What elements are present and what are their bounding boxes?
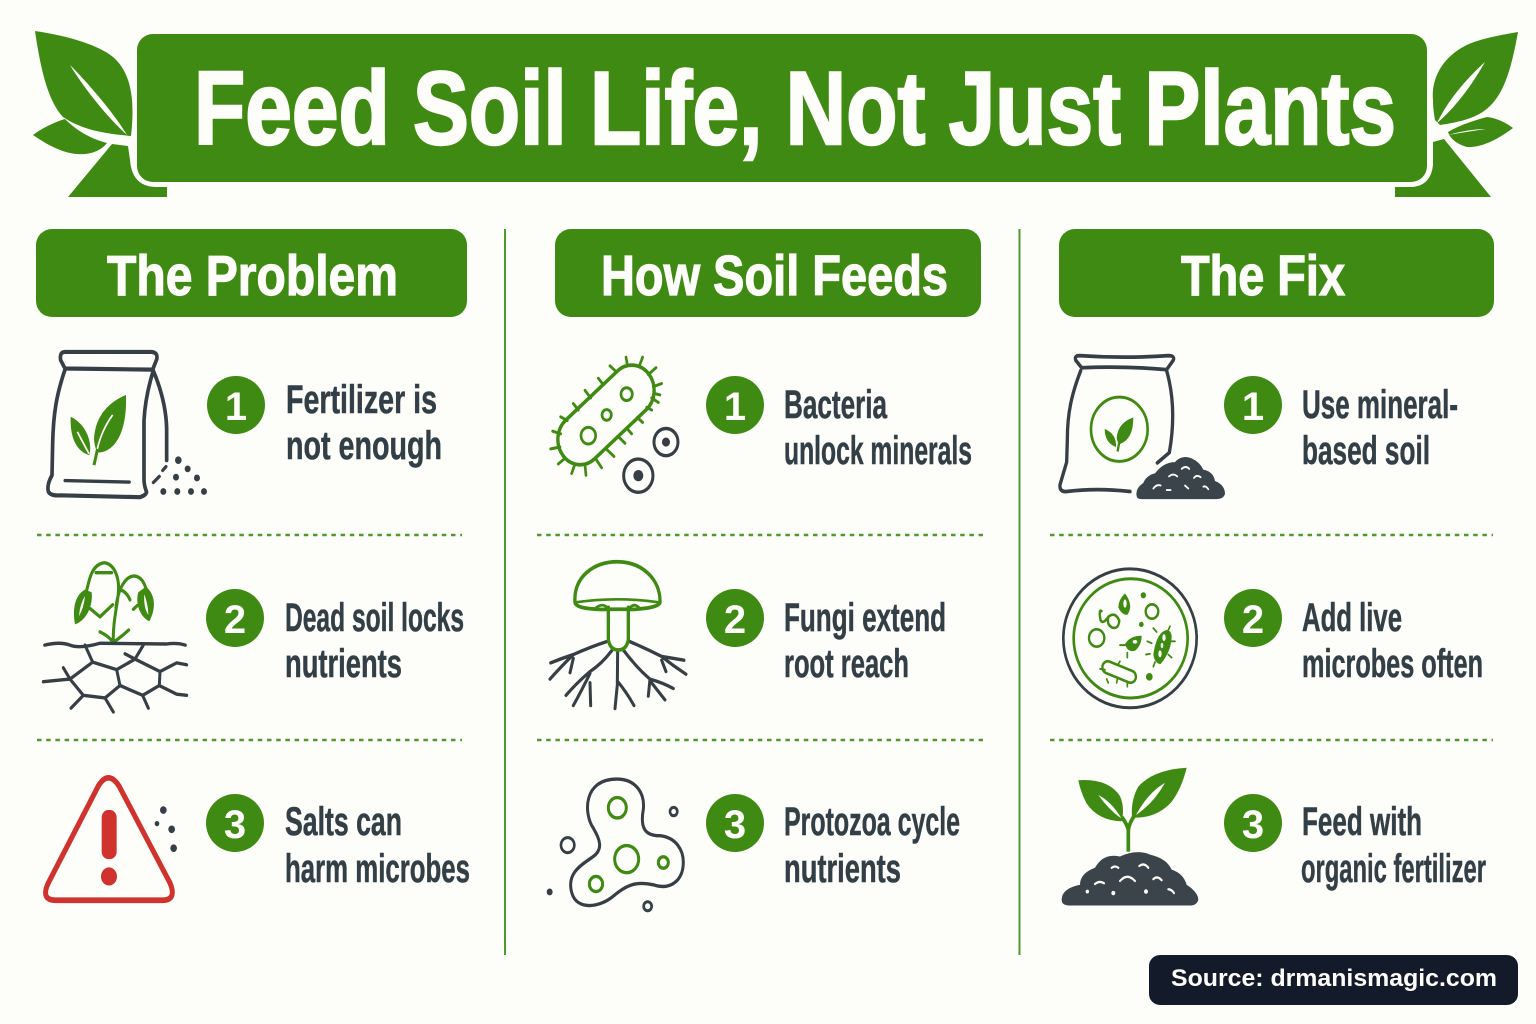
- text: fungi extend root reach: Fungi extend: [784, 596, 946, 640]
- right leaf decoration: [1395, 32, 1518, 197]
- number badge 2: [1224, 589, 1282, 647]
- number badge 3: [1224, 794, 1282, 852]
- icon: mineral soil sack with pile: [1060, 356, 1225, 499]
- text: feed with organic fertilizer: [1301, 800, 1486, 891]
- text: dead soil locks nutrients: nutrients: [285, 642, 402, 686]
- icon: bacteria: [549, 355, 678, 492]
- number badge 2: [206, 589, 264, 647]
- number badge 3: [706, 794, 764, 852]
- number badge 2: 2: [1242, 598, 1264, 642]
- text: dead soil locks nutrients: [285, 596, 464, 686]
- text: protozoa cycle nutrients: [784, 800, 960, 891]
- number badge 2: [706, 589, 764, 647]
- text: use mineral-based soil: based soil: [1302, 429, 1430, 473]
- number badge 1: [207, 376, 265, 434]
- banner bar: [137, 34, 1427, 182]
- text: bacteria unlock minerals: [784, 383, 972, 473]
- text: protozoa cycle nutrients: nutrients: [784, 847, 901, 891]
- icon: seedling in soil: [1062, 768, 1198, 906]
- icon: wilting plant on cracked soil: [43, 563, 187, 712]
- text: add live microbes often: [1302, 596, 1483, 686]
- heading: The Fix: The Fix: [1181, 244, 1345, 308]
- text: fertilizer is not enough: Fertilizer is: [286, 378, 437, 422]
- source badge: [1149, 955, 1518, 1005]
- text: add live microbes often: Add live: [1302, 596, 1402, 640]
- heading: The Problem: The Problem: [107, 244, 398, 308]
- panel: the fix: [1059, 229, 1494, 906]
- number badge 1: 1: [225, 385, 247, 429]
- source badge: Source: drmanismagic.com: [1171, 965, 1497, 992]
- text: bacteria unlock minerals: unlock minerals: [784, 429, 972, 473]
- number badge 2: 2: [724, 598, 746, 642]
- left leaf decoration: [33, 31, 167, 197]
- text: salts can harm microbes: harm microbes: [285, 847, 470, 891]
- icon: fertilizer bag: [48, 352, 207, 497]
- icon: mushroom with roots: [550, 562, 686, 709]
- text: use mineral-based soil: [1302, 383, 1458, 473]
- text: fertilizer is not enough: not enough: [286, 424, 442, 468]
- heading: The Fix: [1059, 229, 1494, 317]
- panel: the problem: [36, 229, 470, 900]
- number badge 1: 1: [724, 385, 746, 429]
- number badge 1: [1224, 376, 1282, 434]
- heading: The Problem: [36, 229, 467, 317]
- number badge 3: [206, 794, 264, 852]
- heading: How Soil Feeds: [555, 229, 981, 317]
- text: dead soil locks nutrients: Dead soil locks: [285, 596, 464, 640]
- panel: how soil feeds: [547, 229, 981, 911]
- text: fungi extend root reach: [784, 596, 946, 686]
- icon: petri dish with microbes: [1063, 569, 1197, 708]
- text: salts can harm microbes: Salts can: [285, 800, 402, 844]
- text: protozoa cycle nutrients: Protozoa cycle: [784, 800, 960, 844]
- number badge 3: 3: [1242, 803, 1264, 847]
- number badge 3: 3: [224, 803, 246, 847]
- text: use mineral-based soil: Use mineral-: [1302, 383, 1458, 427]
- title banner: [33, 31, 1518, 197]
- number badge 3: 3: [724, 803, 746, 847]
- icon: protozoa: [547, 779, 683, 911]
- text: salts can harm microbes: [285, 800, 470, 891]
- text: feed with organic fertilizer: Feed with: [1302, 800, 1422, 844]
- number badge 1: 1: [1242, 385, 1264, 429]
- text: bacteria unlock minerals: Bacteria: [784, 383, 887, 427]
- text: fertilizer is not enough: [286, 378, 442, 468]
- text: fungi extend root reach: root reach: [784, 642, 909, 686]
- number badge 1: [706, 376, 764, 434]
- number badge 2: 2: [224, 598, 246, 642]
- heading: How Soil Feeds: How Soil Feeds: [601, 244, 948, 308]
- icon: red warning triangle: [46, 778, 177, 900]
